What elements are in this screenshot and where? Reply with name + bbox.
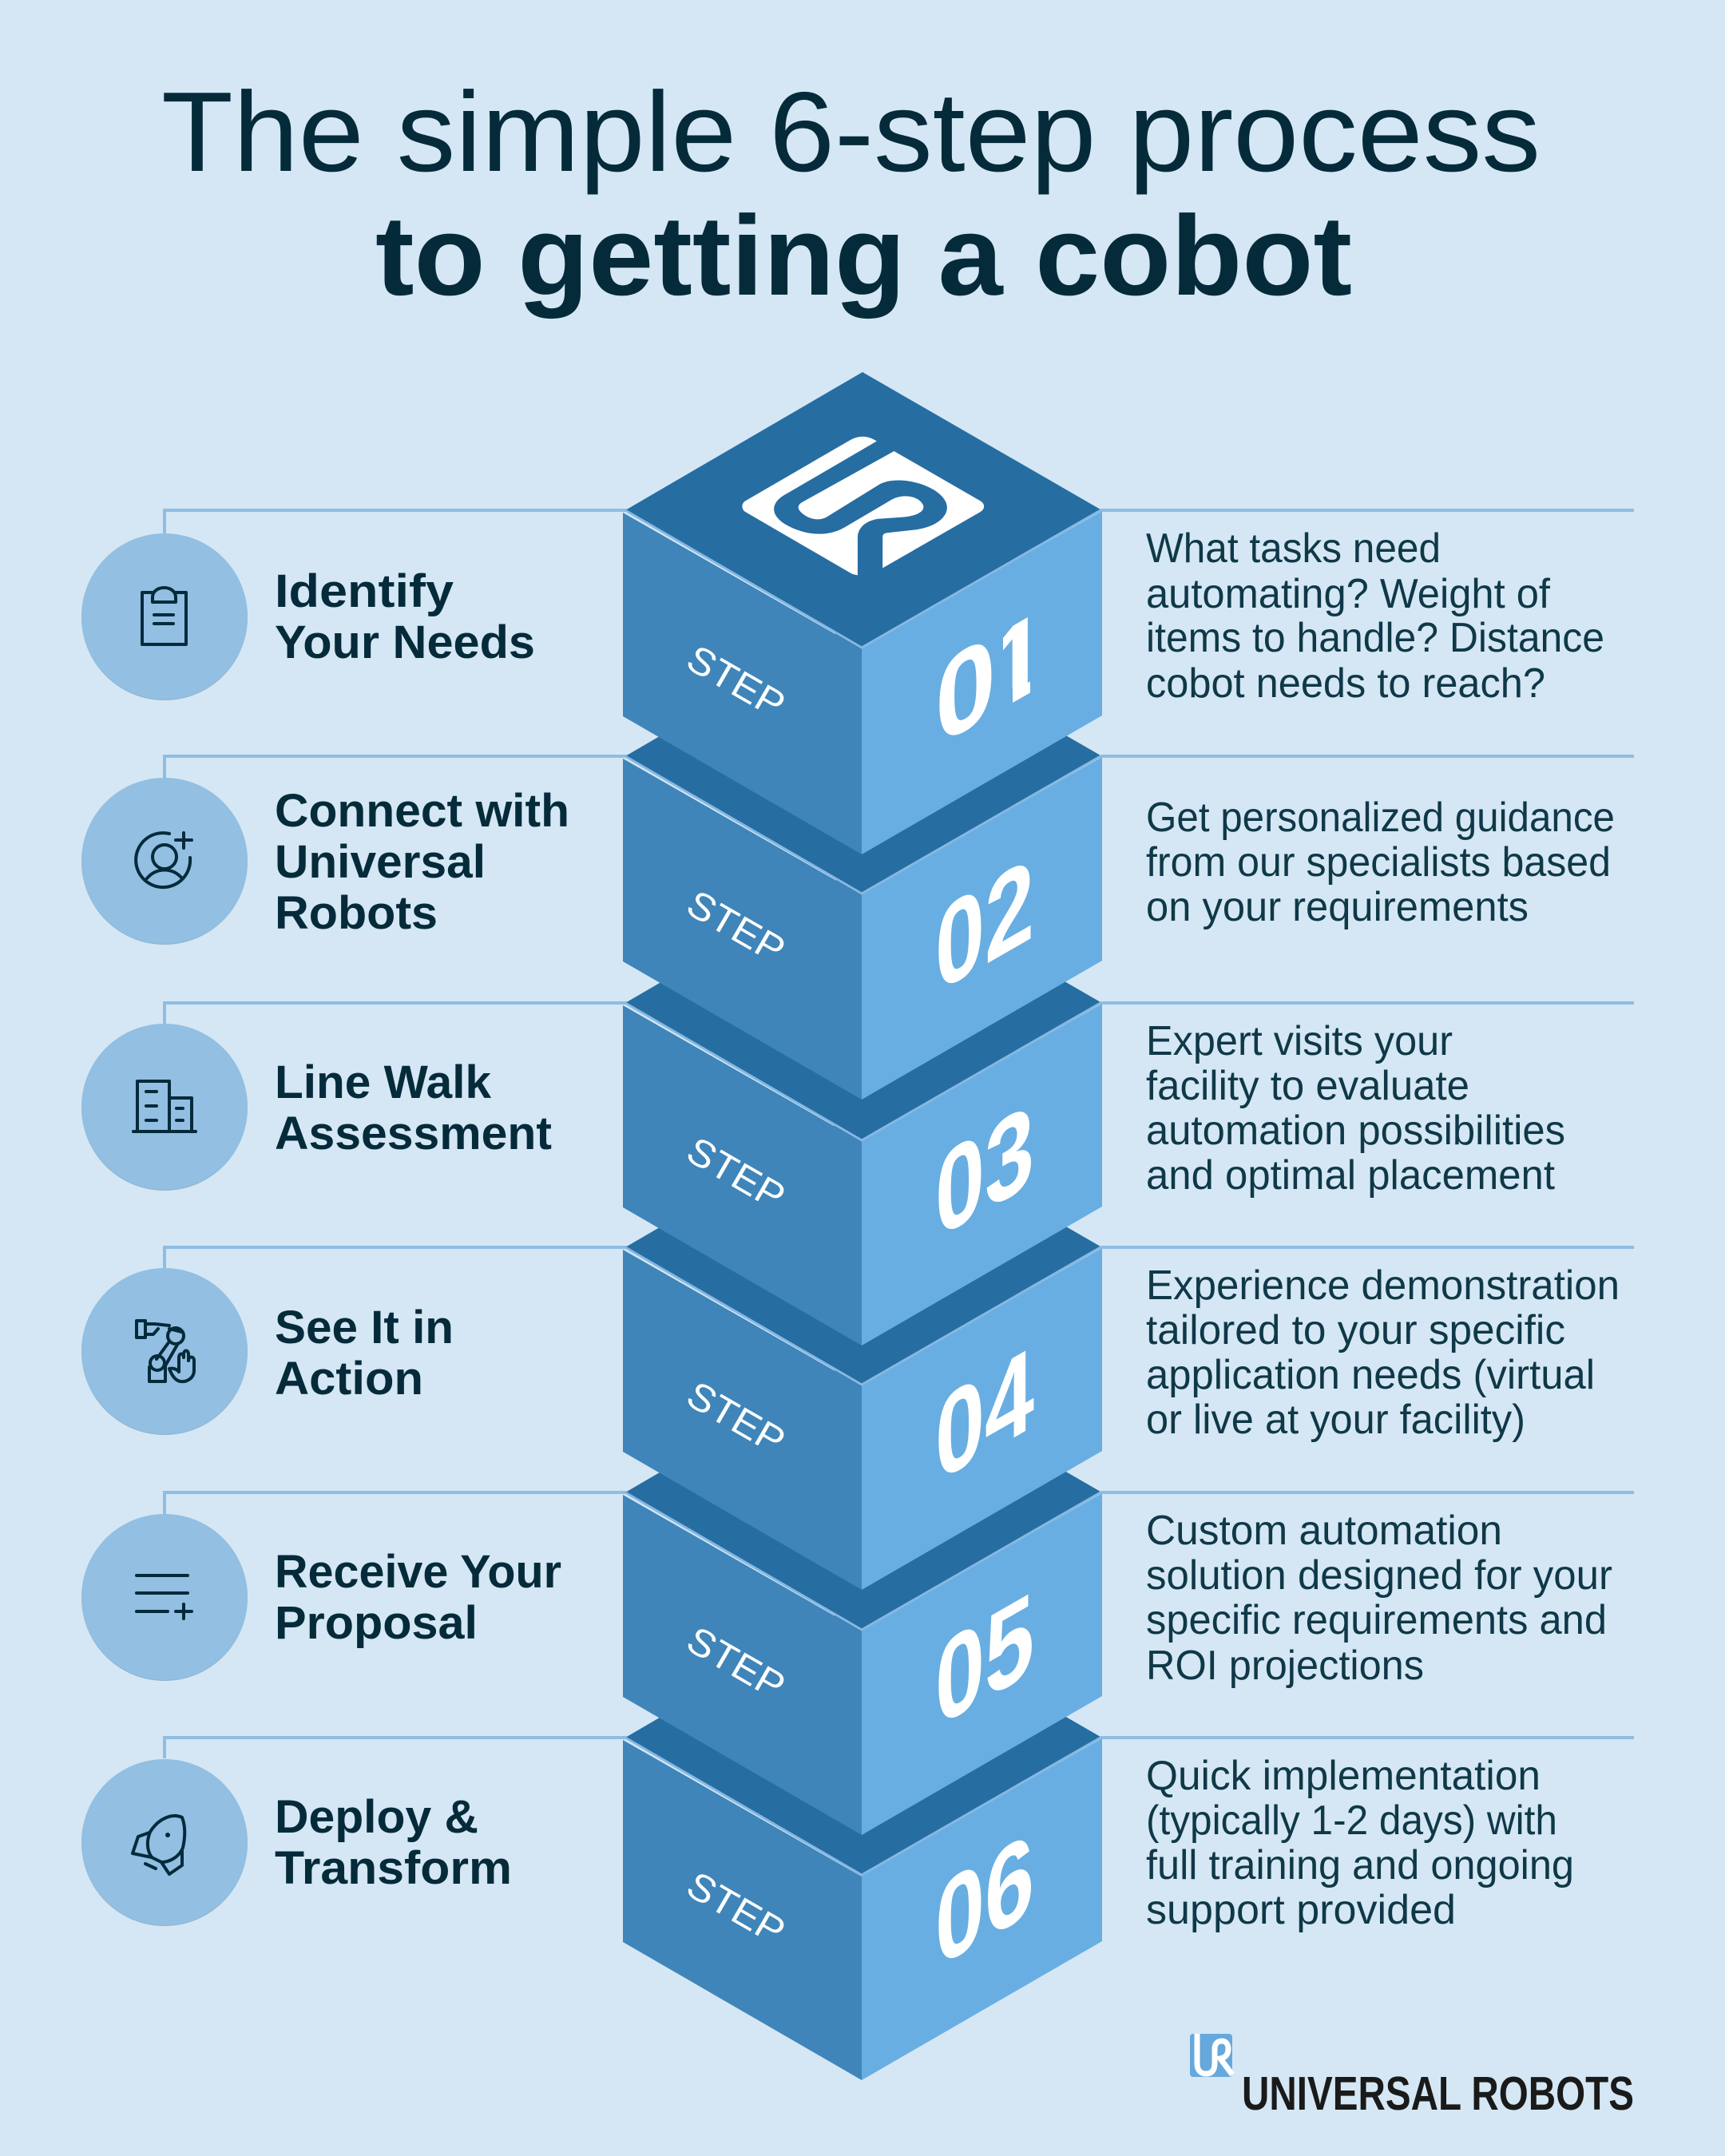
cube: step 01: STEP xyxy=(680,637,792,727)
description: step 6 xyxy=(1146,1753,1574,1933)
cube: step 06: STEP xyxy=(680,1864,792,1953)
title: The simple 6-step process xyxy=(161,69,1541,196)
step 4 label xyxy=(81,1268,454,1435)
description: step 3 xyxy=(1146,1018,1565,1199)
description: step 1: automating? Weight of xyxy=(1146,571,1551,617)
step 5 label: Receive Your xyxy=(275,1546,561,1598)
circle with rocket icon xyxy=(81,1759,248,1926)
step 1 label xyxy=(81,533,535,700)
description: step 3: automation possibilities xyxy=(1146,1108,1565,1154)
cube: step 02: 02 xyxy=(935,831,1034,1018)
description: step 3: and optimal placement xyxy=(1146,1152,1556,1199)
step 4 label: See It in xyxy=(275,1302,454,1353)
description: step 1 xyxy=(1146,525,1604,707)
description: step 5: specific requirements and xyxy=(1146,1597,1607,1643)
footer logo: UNIVERSAL ROBOTS xyxy=(1242,2067,1634,2120)
description: step 5: solution designed for your xyxy=(1146,1552,1612,1599)
cube: step 02 xyxy=(623,618,1102,1100)
footer logo xyxy=(1190,2034,1634,2120)
cube: step 01: 1 xyxy=(986,581,1049,743)
icon: Universal Robots logo on top of cube xyxy=(742,437,984,575)
description: step 2: from our specialists based xyxy=(1146,839,1611,886)
step 2 label: Connect with xyxy=(275,785,569,837)
description: step 4: application needs (virtual xyxy=(1146,1352,1595,1398)
step 6 label: Deploy & xyxy=(275,1791,478,1843)
step 6 label: Transform xyxy=(275,1842,512,1894)
description: step 6: (typically 1-2 days) with xyxy=(1146,1797,1557,1844)
description: step 5: ROI projections xyxy=(1146,1643,1424,1689)
step 2 label xyxy=(81,778,569,945)
circle with user plus icon xyxy=(81,778,248,945)
cube: step 04: STEP xyxy=(680,1373,792,1463)
step 3 label xyxy=(81,1024,552,1191)
circle with robot arm and hand icon xyxy=(81,1268,248,1435)
cube: step 03 xyxy=(623,865,1102,1346)
description: step 6: full training and ongoing xyxy=(1146,1842,1574,1888)
circle with list plus icon xyxy=(81,1514,248,1681)
cube: step 01 xyxy=(623,372,1102,854)
title: to getting a cobot xyxy=(375,192,1352,319)
cube: step 05: STEP xyxy=(680,1619,792,1708)
cube: step 03: 03 xyxy=(935,1077,1034,1264)
connector lines xyxy=(165,510,1634,1758)
cube: step 04 xyxy=(623,1109,1102,1590)
description: step 1: cobot needs to reach? xyxy=(1146,660,1545,707)
step 5 label: Proposal xyxy=(275,1597,478,1649)
step 4 label: Action xyxy=(275,1353,423,1405)
description: step 1: items to handle? Distance xyxy=(1146,615,1604,661)
description: step 2: Get personalized guidance xyxy=(1146,795,1615,841)
description: step 5: Custom automation xyxy=(1146,1508,1502,1554)
description: step 6: Quick implementation xyxy=(1146,1753,1541,1799)
step 3 label: Line Walk xyxy=(275,1056,492,1108)
cube: step 02: STEP xyxy=(680,882,792,972)
step 3 label: Assessment xyxy=(275,1108,552,1159)
cube: step 04: 04 xyxy=(935,1321,1034,1508)
cube: step 05 xyxy=(623,1354,1102,1835)
description: step 4: Experience demonstration xyxy=(1146,1262,1620,1309)
circle with buildings icon xyxy=(81,1024,248,1191)
description: step 2 xyxy=(1146,795,1615,930)
step 6 label xyxy=(81,1759,512,1926)
description: step 4: tailored to your specific xyxy=(1146,1307,1565,1353)
icon: small UR mark xyxy=(1190,2034,1232,2077)
cube: step 06: 06 xyxy=(935,1806,1034,1993)
step 2 label: Universal xyxy=(275,836,486,888)
step 5 label xyxy=(81,1514,561,1681)
cube: step 05: 05 xyxy=(935,1566,1034,1753)
title xyxy=(161,69,1541,319)
step 2 label: Robots xyxy=(275,887,438,939)
circle with clipboard icon xyxy=(81,533,248,700)
description: step 5 xyxy=(1146,1508,1612,1689)
description: step 4: or live at your facility) xyxy=(1146,1397,1525,1443)
cube: step 03: STEP xyxy=(680,1129,792,1219)
description: step 3: Expert visits your xyxy=(1146,1018,1453,1064)
description: step 6: support provided xyxy=(1146,1887,1456,1933)
cube: step 06 xyxy=(623,1599,1102,2080)
description: step 4 xyxy=(1146,1262,1620,1443)
step 1 label: Your Needs xyxy=(275,616,535,668)
description: step 3: facility to evaluate xyxy=(1146,1063,1469,1109)
description: step 1: What tasks need xyxy=(1146,525,1441,572)
cube: step 01: 0 xyxy=(935,608,996,772)
description: step 2: on your requirements xyxy=(1146,884,1529,930)
step 1 label: Identify xyxy=(275,565,454,617)
